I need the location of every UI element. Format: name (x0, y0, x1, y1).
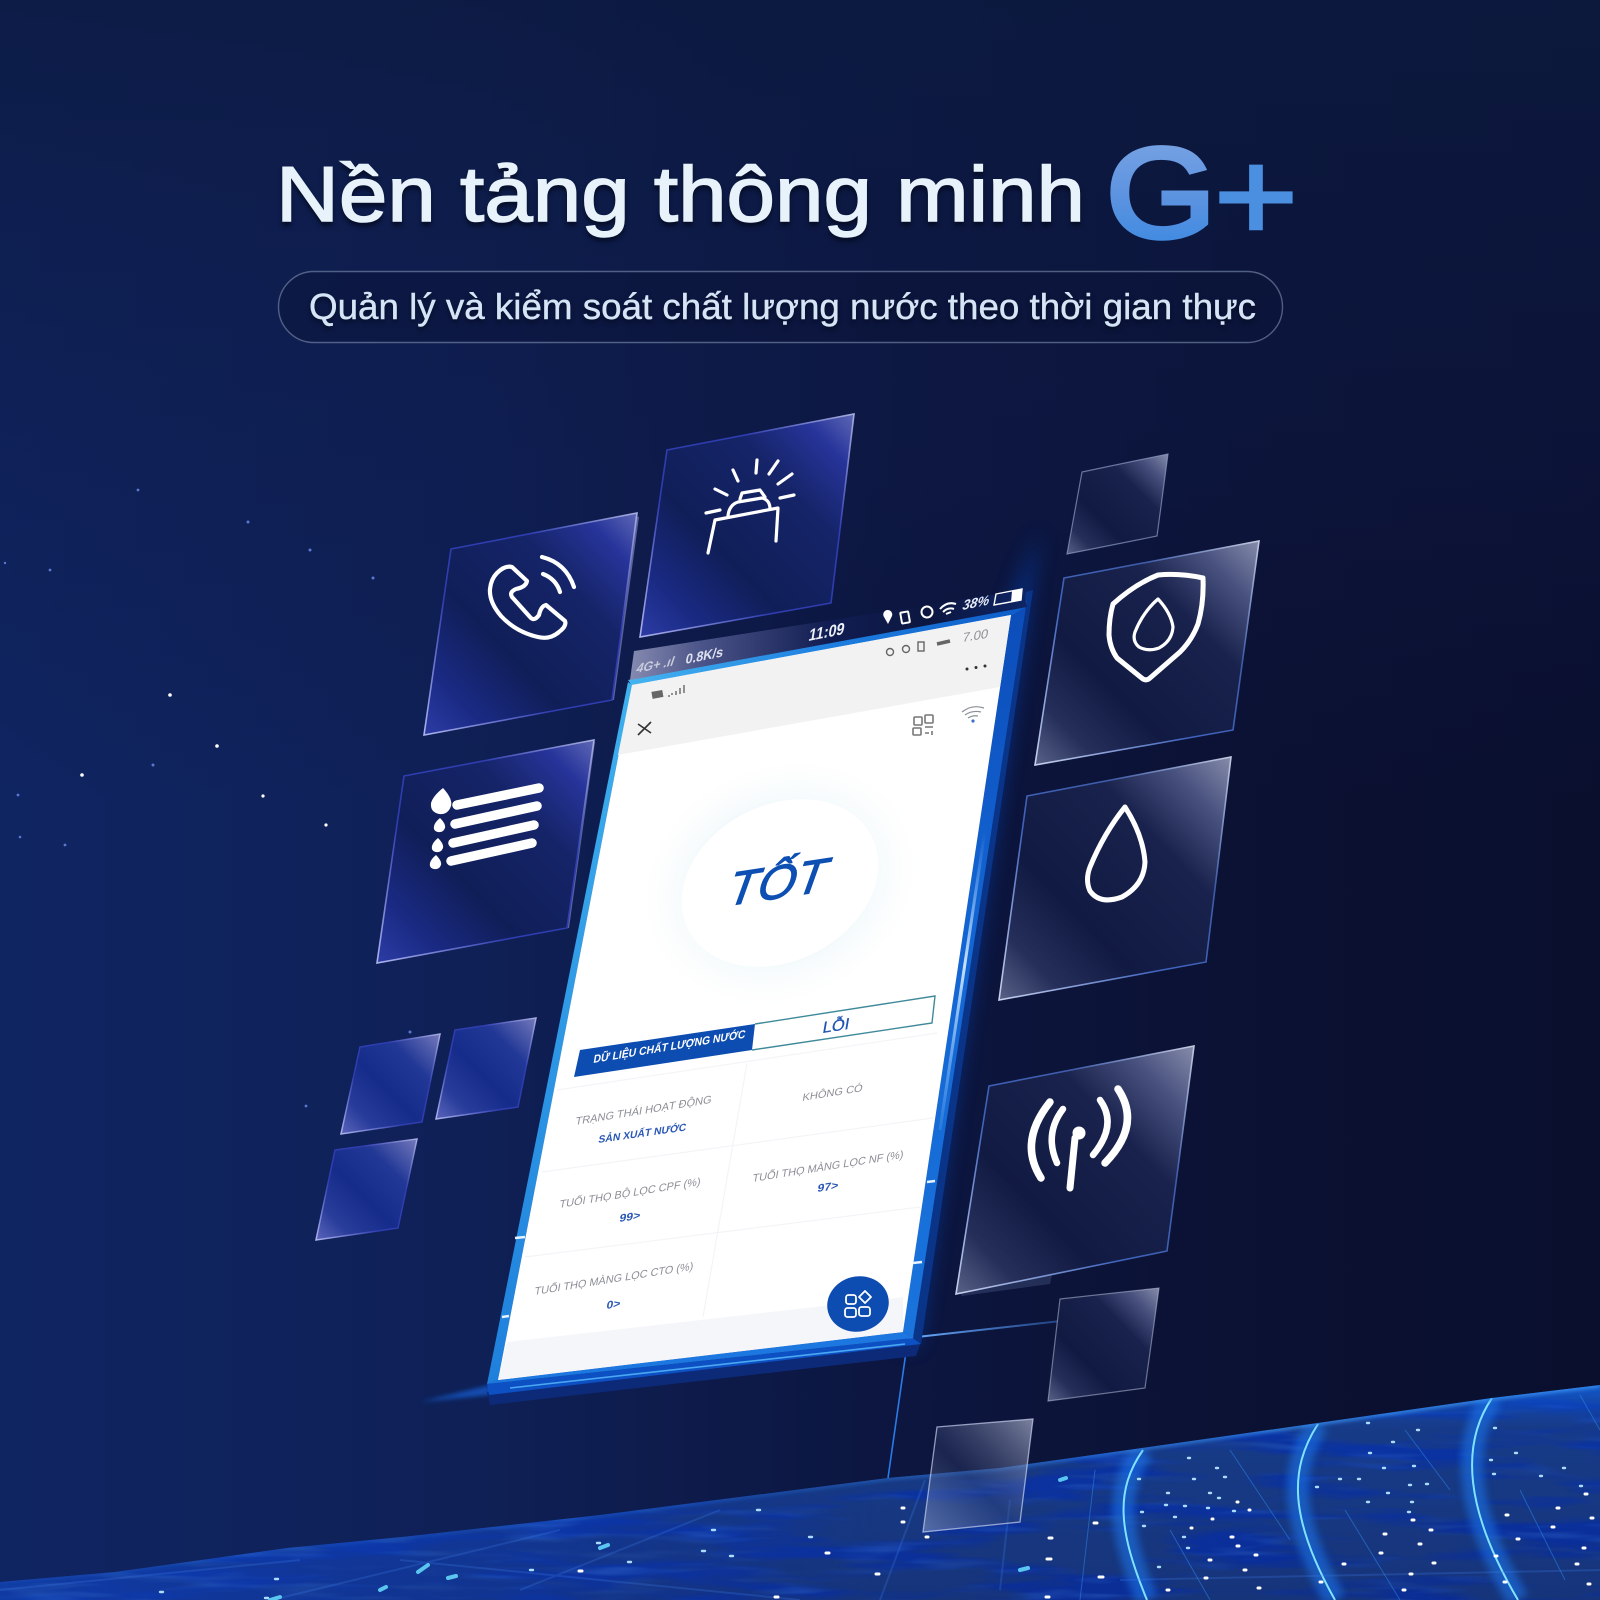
panel: antenna (956, 1046, 1194, 1296)
screen body (498, 615, 1011, 1380)
screen header (618, 615, 1011, 755)
data table: TUỔI THỌ MÀNG LỌC CTO (%) (533, 1260, 694, 1298)
logo: G+: G (1106, 122, 1216, 265)
icon: alarm light (706, 460, 794, 553)
status dial (591, 706, 969, 1060)
data table: KHÔNG CÓ (801, 1081, 864, 1104)
data table: TUỔI THỌ MÀNG LỌC NF (%) (751, 1148, 905, 1185)
data table (525, 1033, 937, 1317)
tabs: DỮ LIỆU CHẤT LƯỢNG NƯỚC (592, 1028, 747, 1066)
small panel: left top (341, 1034, 440, 1134)
logo: G+: + (1214, 125, 1298, 268)
icon: water drop (1088, 807, 1145, 900)
status icons (883, 603, 956, 624)
subtitle text: Quản lý và kiểm soát chất lượng nước theo thời gian thực (309, 286, 1256, 327)
small panel: left bottom (316, 1139, 417, 1240)
icon: phone call (490, 557, 574, 638)
icon: water quality list (430, 788, 539, 869)
menu button (821, 1269, 895, 1339)
data table: 97> (816, 1180, 839, 1195)
data table: 0> (605, 1298, 621, 1312)
icon: signal antenna (1031, 1089, 1127, 1188)
small panel: left right (436, 1018, 536, 1119)
phone frame (487, 590, 1033, 1405)
subtitle pill (278, 272, 1282, 342)
screen header: 7.00 (961, 626, 990, 645)
data table: 99> (618, 1210, 641, 1225)
frame notches (502, 1181, 935, 1317)
panel: shield (1035, 541, 1259, 765)
panel: water list (377, 740, 595, 963)
status bar (630, 589, 1027, 680)
small panel: over floor (923, 1419, 1033, 1532)
stars (4, 489, 412, 1107)
digital floor (0, 1380, 1600, 1600)
data table: SẢN XUẤT NƯỚC (597, 1121, 688, 1146)
status bar: 11:09 (807, 618, 846, 645)
data table: TRẠNG THÁI HOẠT ĐỘNG (574, 1093, 713, 1128)
title: Nền tảng thông minh (276, 150, 1085, 238)
icon: water shield (1109, 574, 1203, 680)
status bar: 38% (961, 592, 991, 613)
panel: alarm (640, 414, 854, 637)
screen bottom band (498, 1297, 903, 1380)
phone glow and light beam (420, 530, 1160, 1478)
tabs: LỖI (821, 1014, 851, 1037)
panel: water drop (999, 757, 1231, 1000)
status value: TỐT (724, 847, 835, 917)
app screen in phone (487, 589, 1033, 1405)
data table: TUỔI THỌ BỘ LỌC CPF (%) (558, 1175, 702, 1211)
logo: G+ (1106, 122, 1298, 268)
panel: call (424, 513, 639, 735)
small panel: right top (1067, 454, 1168, 554)
status bar: 4G+ .ıl (635, 653, 676, 676)
status bar: 0.8K/s (684, 644, 725, 667)
small panel: right lower (1048, 1288, 1159, 1401)
tabs (574, 996, 935, 1077)
